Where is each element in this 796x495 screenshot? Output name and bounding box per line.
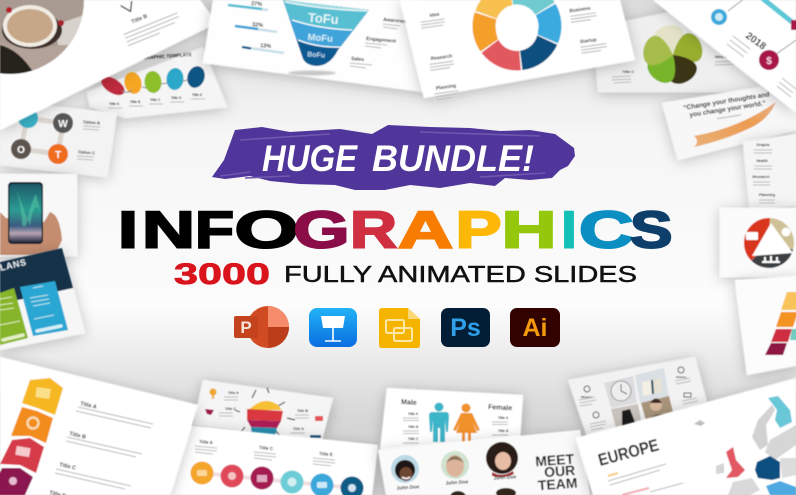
icon: Photoshop: Ps xyxy=(450,314,481,342)
title labels: Title A xyxy=(199,439,214,445)
step labels xyxy=(108,93,205,108)
panel: funnel slide xyxy=(203,0,424,92)
small labels: Title B xyxy=(498,429,509,433)
flower labels: Title C xyxy=(622,69,634,74)
cycle labels xyxy=(419,0,611,100)
panel: four photos slide xyxy=(568,357,707,437)
icon: Illustrator: Ai xyxy=(522,314,548,342)
quote text xyxy=(683,91,772,124)
main title: S xyxy=(630,202,672,260)
main title: G xyxy=(294,202,350,260)
male figure xyxy=(429,402,449,442)
funnel chart: BoFu xyxy=(307,51,325,60)
title labels xyxy=(195,439,335,466)
SWOT letter circles: O xyxy=(17,145,25,156)
funnel labels: Awareness xyxy=(383,17,410,25)
bulb labels: Title B xyxy=(297,409,308,413)
coffee cup photo xyxy=(0,0,90,75)
panel: SWOT slide xyxy=(0,105,117,177)
side icons xyxy=(205,388,323,438)
triangle circle chart xyxy=(746,223,793,263)
title labels: Title E xyxy=(319,451,333,457)
cycle labels: Business xyxy=(569,5,591,14)
icon: Keynote xyxy=(309,308,357,347)
small labels: Title B xyxy=(408,425,419,429)
main title: I xyxy=(118,202,138,260)
percentage bars: 13% xyxy=(260,43,271,50)
panel: health list slide xyxy=(743,134,796,211)
hexagon steps xyxy=(0,378,63,495)
feature labels: History xyxy=(676,375,687,379)
funnel labels: Sales xyxy=(351,56,365,63)
step labels: Title C xyxy=(150,98,161,102)
funnel chart xyxy=(282,0,370,76)
step labels: Title D xyxy=(171,96,182,100)
flower labels: Idea A xyxy=(715,54,727,59)
main title: R xyxy=(350,202,397,260)
phone with aurora photo xyxy=(0,182,62,255)
Europe text lines xyxy=(608,464,683,495)
SWOT letter circles: W xyxy=(58,119,68,130)
panel: title steps slide xyxy=(0,357,198,495)
photo tiles xyxy=(604,368,674,428)
female figure xyxy=(453,404,480,442)
Europe heading: EUROPE xyxy=(596,435,661,470)
option labels: Option B xyxy=(83,119,100,125)
SWOT letter circles xyxy=(11,108,73,164)
banner title: BUNDLE! xyxy=(372,138,534,179)
meet our team heading: OUR xyxy=(544,462,576,480)
option labels xyxy=(77,119,100,160)
step titles: Title C xyxy=(59,462,76,472)
title B text block: Title B xyxy=(131,14,148,25)
cycle labels: Research xyxy=(430,53,453,62)
title labels: Title C xyxy=(259,445,274,451)
bulb labels: Title D xyxy=(293,427,304,431)
cycle labels: Startup xyxy=(580,37,597,45)
feature labels: Mission xyxy=(581,395,592,399)
cycle ring center hole xyxy=(496,9,538,51)
timeline circles xyxy=(190,462,364,495)
cycle labels: Idea xyxy=(429,12,440,19)
portrait names: John Doe xyxy=(396,484,420,492)
bulb labels xyxy=(219,391,309,433)
main title: C xyxy=(579,202,634,260)
meet our team heading: MEET xyxy=(535,451,575,469)
gender headings: Female xyxy=(488,404,512,412)
portrait names: John Doe xyxy=(445,479,469,487)
lightbulb xyxy=(235,388,295,437)
main title: P xyxy=(456,202,502,260)
step titles xyxy=(49,401,153,495)
title B text block xyxy=(113,0,182,46)
panel: plans slide xyxy=(0,248,85,350)
quote text: you change your world.” xyxy=(689,100,766,119)
gender headings: Male xyxy=(401,399,417,407)
funnel labels xyxy=(350,17,410,68)
subtitle count: 3000 xyxy=(174,258,270,291)
timeline nodes xyxy=(711,0,796,70)
template heading: GRAPHIC TEMPLATE xyxy=(143,52,193,61)
team portraits xyxy=(391,442,518,495)
small labels: Title A xyxy=(498,416,509,420)
year label: 2018 xyxy=(743,31,768,53)
feature labels xyxy=(579,367,698,430)
icon: Illustrator xyxy=(510,308,560,347)
icon: Photoshop xyxy=(441,308,490,347)
flower petals xyxy=(640,23,706,88)
panel: male female slide xyxy=(380,388,523,450)
panel: timeline circles slide xyxy=(170,425,378,495)
bulb labels: Title A xyxy=(228,391,239,395)
cycle labels: Planning xyxy=(436,83,457,92)
icon: PowerPoint: P xyxy=(240,318,252,337)
step titles: Title B xyxy=(69,431,86,441)
panel: coffee photo slide xyxy=(0,0,217,130)
list labels: Planning xyxy=(759,193,776,197)
subtitle: FULLY ANIMATED SLIDES xyxy=(284,261,637,287)
panel: lightbulb slide xyxy=(193,380,333,440)
main title: O xyxy=(234,202,298,260)
step markers xyxy=(98,64,207,99)
main title: A xyxy=(398,202,453,260)
step titles: Title A xyxy=(80,401,97,411)
panel: triangle circle slide xyxy=(720,208,796,277)
orange brush stroke xyxy=(694,102,776,147)
panel: quote slide xyxy=(662,87,796,160)
main title: N xyxy=(142,202,195,260)
SWOT letter circles: T xyxy=(55,150,61,161)
meet our team heading: TEAM xyxy=(537,475,578,493)
icon: PowerPoint xyxy=(234,306,289,348)
option labels: Option C xyxy=(78,149,95,155)
panel: staircase slide xyxy=(735,276,796,375)
panel: flower chart slide xyxy=(596,12,770,92)
panel: cycle chart slide xyxy=(400,0,635,100)
portrait names xyxy=(396,474,517,492)
list labels: Research xyxy=(752,175,770,179)
panel: team slide xyxy=(378,430,590,495)
list labels xyxy=(752,143,776,203)
small labels: Title C xyxy=(408,437,419,441)
timeline nodes: $ xyxy=(766,56,772,67)
icon: Google Slides xyxy=(379,308,420,348)
panel: Europe map slide xyxy=(576,378,796,495)
funnel labels: Engagement xyxy=(366,36,397,45)
panel: timeline slide xyxy=(653,0,796,113)
small labels: Title A xyxy=(408,412,419,416)
meet our team heading xyxy=(535,451,578,493)
step labels: Title A xyxy=(109,102,120,106)
list labels: Health xyxy=(756,159,768,163)
pricing cards xyxy=(0,281,68,345)
small labels xyxy=(403,412,509,443)
flower labels xyxy=(612,54,737,83)
main title: I xyxy=(562,202,576,260)
funnel chart: MoFu xyxy=(307,32,333,45)
main title: F xyxy=(195,202,234,260)
panel: phone photo slide xyxy=(0,174,77,256)
portrait names: John Doe xyxy=(493,474,517,482)
step labels: Title B xyxy=(130,100,141,104)
percentage bars: 27% xyxy=(251,1,262,8)
banner title: HUGE xyxy=(262,138,358,179)
cycle ring xyxy=(471,0,563,72)
stacked staircase chart xyxy=(765,292,796,355)
purple brush banner xyxy=(212,125,575,190)
percentage bars: 32% xyxy=(252,22,263,29)
quote text: “Change your thoughts and xyxy=(683,91,770,112)
funnel chart: ToFu xyxy=(307,10,339,27)
step labels: Title E xyxy=(192,93,203,97)
list labels: Graphs xyxy=(756,143,770,147)
Europe map xyxy=(694,396,796,495)
panel: roadmap template slide xyxy=(87,47,227,118)
bulb labels: Title C xyxy=(225,407,236,411)
main title: H xyxy=(502,202,556,260)
percentage bars xyxy=(228,1,284,53)
gender headings xyxy=(401,399,512,412)
